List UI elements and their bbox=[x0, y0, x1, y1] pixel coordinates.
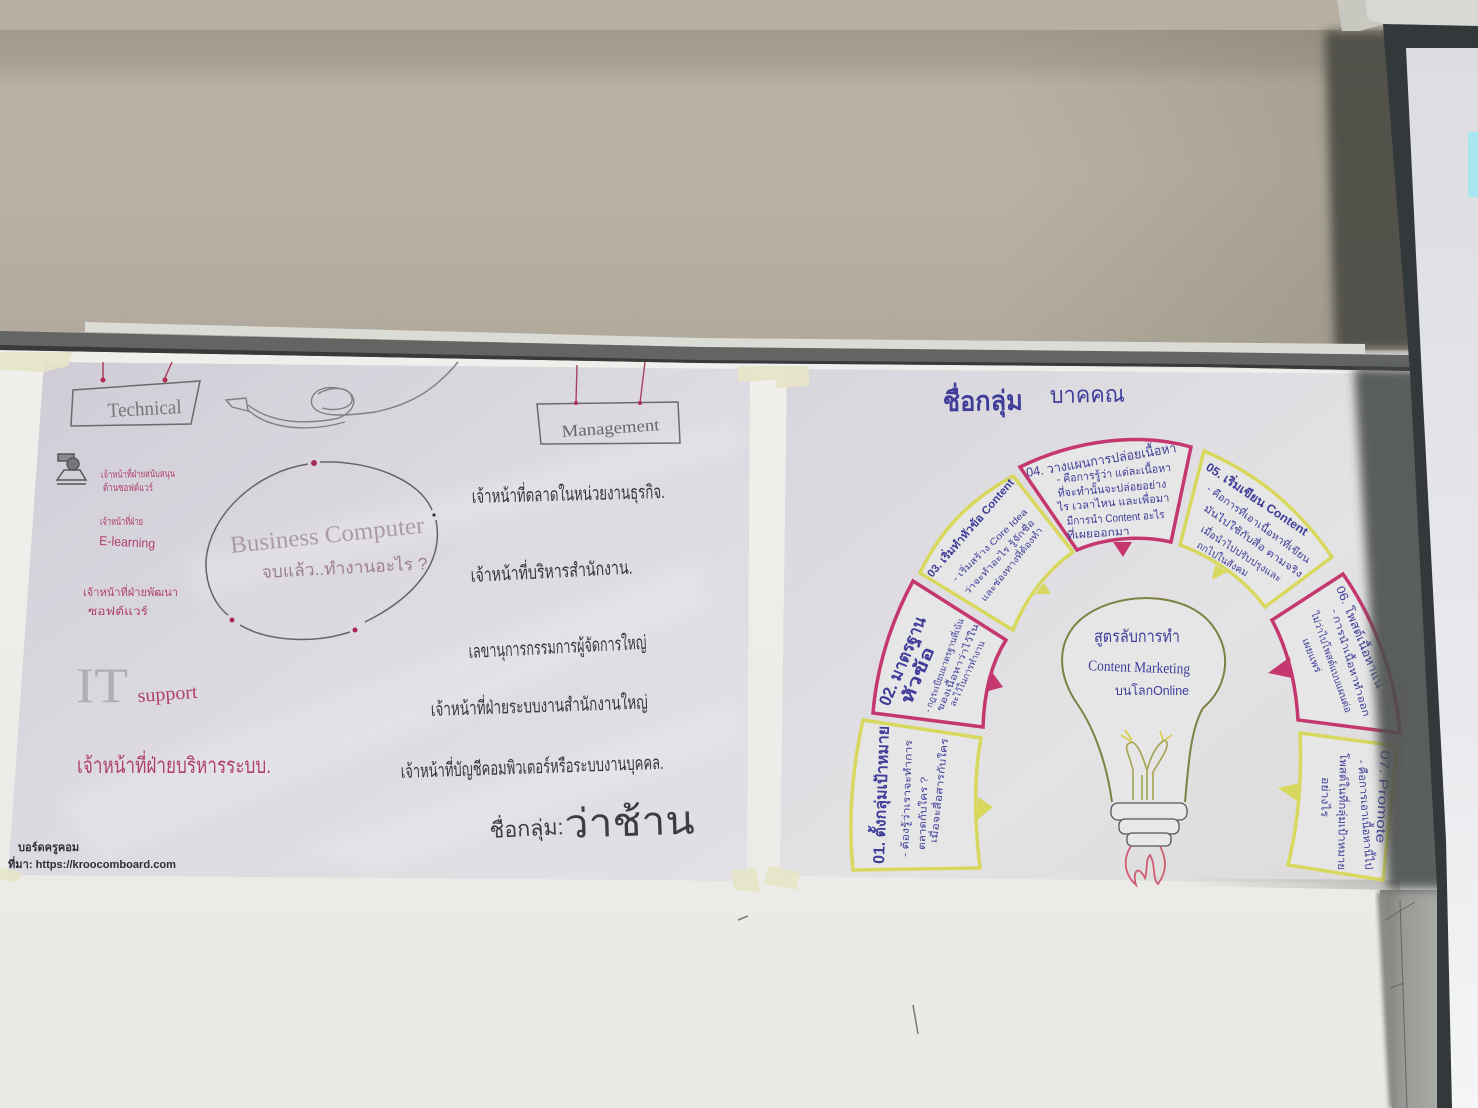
box: Management bbox=[537, 362, 680, 444]
panel: step 07 bbox=[1278, 733, 1397, 880]
text: IT support bbox=[76, 657, 199, 713]
panel: step 06: เผยแพร่ bbox=[1299, 637, 1323, 675]
bulb caption bbox=[1088, 627, 1191, 698]
text: IT support: IT bbox=[76, 657, 128, 713]
panel: step 04: ที่เผยออกมา bbox=[1066, 523, 1130, 542]
panel: step 02: 02. มาตรฐาน bbox=[875, 613, 932, 709]
panel: step 01: ตลาดกับใคร ? bbox=[916, 776, 931, 850]
panel: step 04: ที่จะทำนั้นจะปล่อยอย่าง bbox=[1057, 476, 1167, 500]
panel: step 04 bbox=[1020, 438, 1191, 557]
panel: left poster, Business Computer bbox=[8, 362, 750, 881]
panel: step 05 bbox=[1180, 451, 1332, 607]
projector screen frame bbox=[1383, 24, 1478, 1108]
text: technical job titles: ซอฟต์แวร์ bbox=[88, 605, 148, 618]
text: technical job titles: เจ้าหน้าที่ฝ่ายพัฒนา bbox=[83, 584, 178, 599]
bulb caption: บนโลกOnline bbox=[1115, 683, 1189, 698]
text: IT support: support bbox=[137, 682, 199, 707]
panel: step 05: มันไปใช้กับสื่อ ตามจริง bbox=[1201, 501, 1306, 580]
masking tape bbox=[0, 352, 810, 892]
box: Management: Management bbox=[561, 415, 660, 441]
shadow over the right edge of the poster bbox=[1354, 368, 1445, 889]
panel: step 05: - คือการที่เอาเนื้อหาที่เขียน bbox=[1204, 481, 1314, 566]
diagram: Business Computer circle bbox=[206, 460, 437, 639]
light bulb bbox=[1062, 598, 1225, 885]
panel: step 07: - คือการเอาเนื้อหานี้ไป bbox=[1355, 759, 1378, 870]
panel: step 03: 03. เริ่มทำหัวข้อ Content bbox=[923, 475, 1017, 580]
panel: step 02: - กฎระเบียบมาตรฐานที่เน้น bbox=[921, 617, 967, 714]
panel: step 01 bbox=[851, 720, 993, 870]
panel: step 03: และช่องทางที่ต้องทำ bbox=[977, 524, 1044, 603]
projector screen bbox=[1406, 48, 1478, 1108]
box: Technical bbox=[71, 362, 200, 426]
panel: step 01: เมื่อจะสื่อสารกับใคร bbox=[926, 737, 951, 843]
paper wrinkles bbox=[60, 420, 740, 875]
diagram: Business Computer circle: จบแล้ว..ทำงานอะไร ? bbox=[261, 553, 428, 582]
panel: step 03: - เริ่มสร้าง Core Idea bbox=[949, 505, 1029, 583]
bulb caption: สูตรลับการทำ bbox=[1094, 627, 1180, 647]
panel: step 07: 07. Promote bbox=[1373, 750, 1393, 844]
text: credit: บอร์ดครูคอม bbox=[18, 841, 79, 855]
panel: right poster, Content Marketing bbox=[780, 369, 1425, 890]
panel: step 03 bbox=[920, 475, 1073, 630]
whiteboard bbox=[0, 350, 1438, 1108]
box: Technical: Technical bbox=[107, 396, 183, 422]
text: group name: ว่าช้าน bbox=[564, 798, 695, 847]
text: management job titles bbox=[400, 478, 665, 784]
panel: step 06 bbox=[1268, 574, 1400, 733]
text: system administrator: เจ้าหน้าที่ฝ่ายบริหารระบบ. bbox=[77, 750, 271, 778]
panel: step 02: หัวข้อ bbox=[897, 644, 938, 707]
title: บาคคณ bbox=[1050, 381, 1125, 408]
panel: step 05: เมื่อนำไปปรับปรุงและ bbox=[1198, 522, 1285, 585]
text: group name bbox=[489, 798, 695, 847]
panel: step 06: 06. โพสต์เนื้อหาแน่ bbox=[1333, 583, 1389, 690]
icon: person at a desk bbox=[57, 454, 86, 484]
panel: step 04: ไร เวลาไหน และเพื่อมา bbox=[1056, 489, 1170, 514]
title: ชื่อกลุ่ม bbox=[942, 381, 1023, 419]
text: group name: ชื่อกลุ่ม: bbox=[489, 811, 564, 844]
panel: step 04: - คือการรู้ว่า แต่ละเนื้อหา bbox=[1056, 459, 1172, 486]
diagram: Business Computer circle: Business Computer bbox=[229, 513, 426, 559]
text: management job titles: เจ้าหน้าที่บัญชีคอมพิวเตอร์หรือระบบงานบุคคล. bbox=[400, 749, 664, 784]
panel: step 02: ของเนื้อหาว่าไว้ใน bbox=[933, 622, 981, 713]
text: technical job titles: เจ้าหน้าที่ฝ่าย bbox=[100, 514, 143, 528]
panel: step 06: ไม่ว่าไปโพสต์แบบแผนต่อ bbox=[1308, 609, 1355, 714]
drawing: network cable bbox=[226, 362, 458, 428]
text: management job titles: เจ้าหน้าที่ตลาดในหน่วยงานธุรกิจ. bbox=[471, 478, 665, 509]
panel: step 07: โพสต์ในที่กลุ่มเป้าหมาย bbox=[1335, 753, 1352, 870]
panel: step 01: 01. ตั้งกลุ่มเป้าหมาย bbox=[866, 725, 894, 864]
panel: step 04: 04. วางแผนการปล่อยเนื้อหา bbox=[1025, 438, 1177, 480]
text: management job titles: เลขานุการกรรมการผู้จัดการใหญ่ bbox=[468, 632, 647, 664]
text: technical job titles: เจ้าหน้าที่ฝ่ายสนับสนุน bbox=[101, 466, 175, 481]
text: management job titles: เจ้าหน้าที่บริหารสำนักงาน. bbox=[470, 554, 633, 587]
text: technical job titles: E-learning bbox=[99, 533, 156, 551]
panel: step 05: ถกไปในสังคม bbox=[1194, 539, 1250, 579]
panel: step 06: - การนำเนื้อหาทำออก bbox=[1328, 607, 1374, 718]
wall above the whiteboard bbox=[0, 0, 1478, 350]
text: management job titles: เจ้าหน้าที่ฝ่ายระบบงานสำนักงานใหญ่ bbox=[430, 688, 648, 721]
panel: step 02 bbox=[873, 581, 1006, 727]
panel: step 03: ว่าจะทำอะไร รู้จักชื่อ bbox=[961, 517, 1037, 597]
panel: step 02: ละไว้ในการทำงาน bbox=[948, 639, 987, 708]
panel: step 04: มีการนำ Content อะไร bbox=[1066, 508, 1165, 528]
panel: step 01: - ต้องรู้ว่าเราจะทำการ bbox=[899, 739, 915, 857]
text: credit: ที่มา: https://kroocomboard.com bbox=[8, 856, 176, 871]
title bbox=[942, 381, 1125, 419]
panel: step 05: 05. เริ่มเขียน Content bbox=[1203, 458, 1312, 539]
whiteboard rail bbox=[0, 322, 1410, 371]
text: credit bbox=[8, 841, 176, 871]
text: technical job titles: ด้านซอฟต์แวร์ bbox=[103, 482, 153, 494]
text: technical job titles bbox=[83, 466, 178, 618]
bulb caption: Content Marketing bbox=[1088, 658, 1191, 678]
panel: step 07: อย่างไร bbox=[1318, 777, 1332, 817]
